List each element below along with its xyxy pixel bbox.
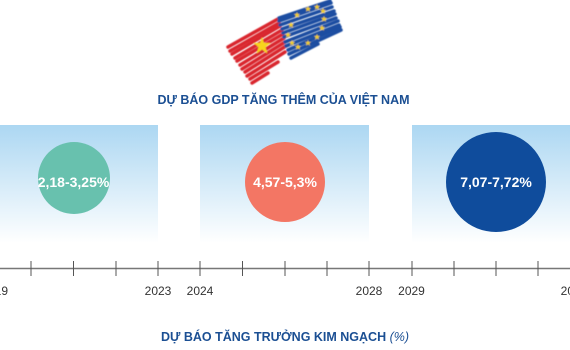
value: 2029 onward: 7,07-7,72%: [460, 174, 532, 190]
panel: 2019-2023: [0, 125, 158, 243]
panel: 2029 onward: [412, 125, 570, 243]
circle: 2029 onward value: [446, 132, 546, 232]
panel: 2024-2028: [200, 125, 369, 243]
heading: export turnover forecast: DỰ BÁO TĂNG TRƯỞNG KIM NGẠCH (%): [161, 330, 409, 344]
circle: 2019-2023 value: [38, 142, 110, 214]
axis label: 2028: 2028: [356, 284, 382, 298]
axis label: 2023: 2023: [145, 284, 171, 298]
axis label: 2024: 2024: [187, 284, 213, 298]
timeline axis: [0, 261, 570, 276]
value: 2019-2023: 2,18-3,25%: [38, 174, 109, 190]
heading: GDP forecast: DỰ BÁO GDP TĂNG THÊM CỦA VIỆT NAM: [157, 93, 410, 107]
circle: 2024-2028 value: [245, 142, 325, 222]
icon: Vietnam and EU brush flags: [225, 0, 344, 86]
axis label: 2029: 2029: [398, 284, 425, 298]
value: 2024-2028: 4,57-5,3%: [253, 174, 317, 190]
